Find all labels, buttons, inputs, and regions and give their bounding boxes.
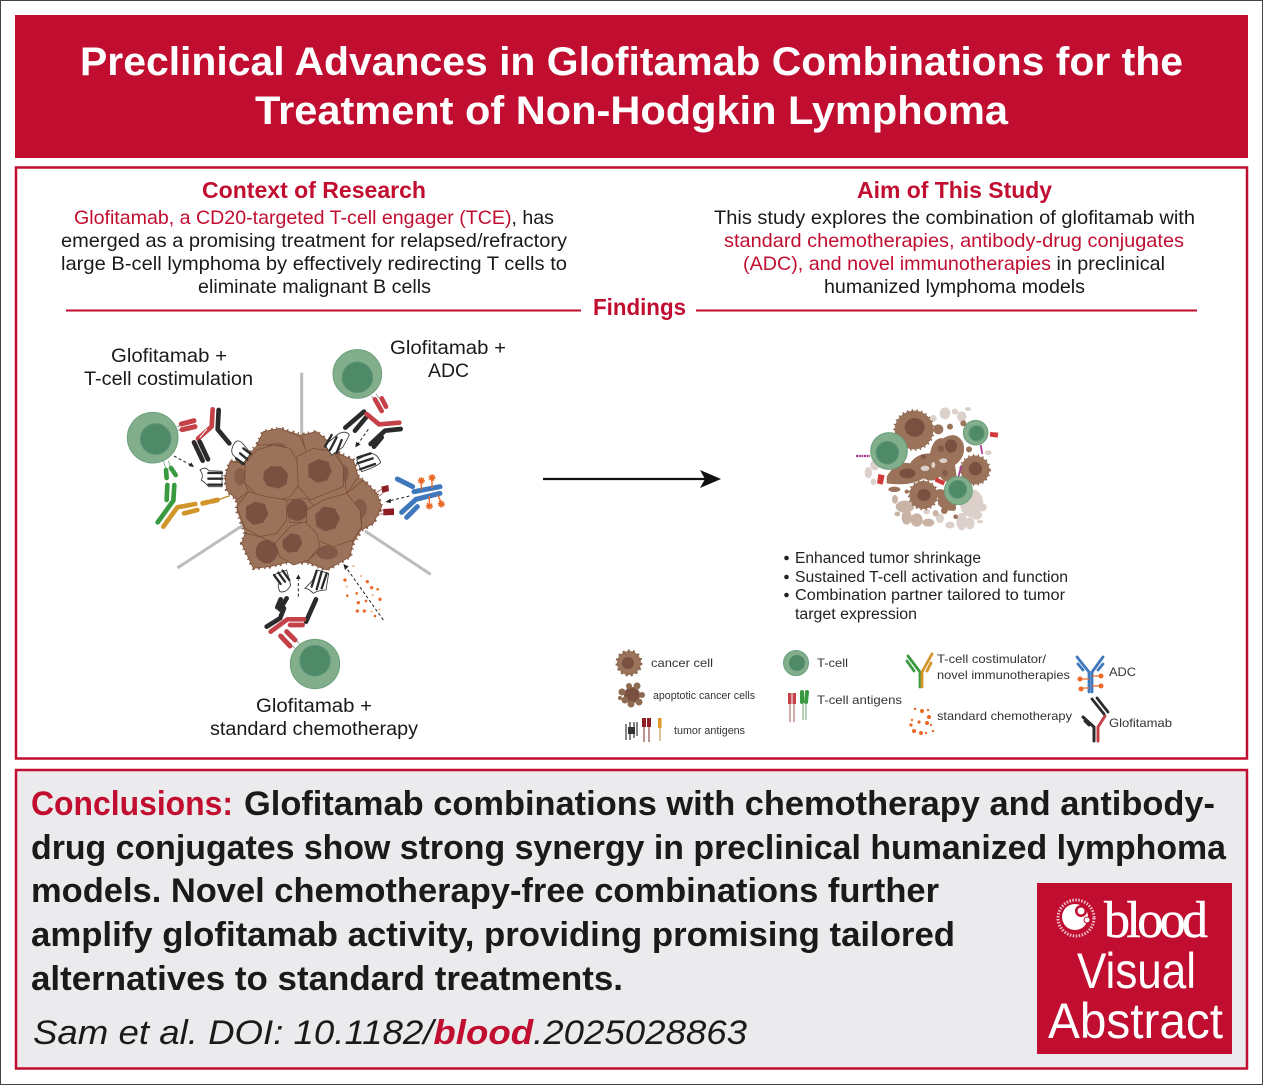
heading: findings: Findings: [593, 294, 686, 320]
label: standard chemotherapy: standard chemotherapy: [210, 719, 419, 740]
glofitamab and antigens: chemotherapy arm: [267, 570, 329, 648]
legend: ADC: ADC: [1109, 665, 1136, 679]
text block: context of research: large B-cell lymphoma by effectively redirecting T cells to: [61, 253, 567, 275]
legend: apoptotic cancer cells: apoptotic cancer cells: [653, 690, 755, 702]
legend: T-cell costimulator: [907, 652, 1070, 687]
text block: aim of this study: humanized lymphoma models: [824, 276, 1085, 298]
legend: [617, 650, 1172, 742]
surviving tumor cells: [887, 411, 989, 519]
text block: context of research: eliminate malignant B cells: [198, 276, 431, 298]
text block: conclusions: Glofitamab combinations with chemotherapy and antibody-: [244, 785, 1215, 823]
text block: context of research: emerged as a promising treatment for relapsed/refractory: [61, 230, 567, 252]
text block: conclusions: drug conjugates show strong synergy in preclinical humanized lymphoma: [31, 829, 1227, 867]
legend: apoptotic cancer cells: [618, 682, 755, 708]
badge: blood visual abstract: Abstract: [1048, 993, 1223, 1049]
T cell: chemotherapy arm: [290, 639, 340, 689]
legend: T-cell antigens: [788, 692, 902, 722]
text block: aim of this study: This study explores the combination of glofitamab with: [714, 207, 1195, 229]
apoptotic debris: [865, 407, 992, 530]
label: ADC: Glofitamab +: [390, 338, 506, 359]
legend: cancer cell: [617, 651, 713, 675]
T cell: costimulation arm: [127, 412, 178, 463]
text block: context of research: [61, 177, 567, 298]
tumor cell cluster: [225, 428, 382, 570]
text block: conclusions: amplify glofitamab activity, providing promising tailored: [31, 916, 955, 954]
text block: conclusions: Conclusions:: [31, 785, 233, 823]
chemotherapy particles and arrow: [343, 564, 383, 620]
title banner: [15, 15, 1248, 158]
legend: cancer cell: cancer cell: [651, 656, 713, 670]
legend: T-cell: T-cell: [817, 656, 848, 670]
text block: findings bullets: target expression: [795, 606, 917, 623]
text block: conclusions: models. Novel chemotherapy-free combinations further: [31, 872, 939, 910]
divider spokes: [177, 373, 431, 574]
legend: Glofitamab: Glofitamab: [1109, 716, 1172, 730]
legend: T-cell costimulator: novel immunotherapies: [937, 668, 1070, 682]
text block: aim of this study: [714, 177, 1195, 298]
legend: T-cell: [784, 650, 848, 676]
text block: conclusions: [31, 785, 1227, 998]
label: standard chemotherapy: [210, 696, 419, 740]
T cell: ADC arm: [333, 350, 382, 398]
label: ADC: [390, 338, 506, 382]
label: T-cell costimulation: T-cell costimulation: [84, 369, 253, 390]
panel: conclusions: [16, 770, 1247, 1068]
text block: context of research: Glofitamab, a CD20-targeted T-cell engager (TCE), has: [74, 207, 554, 229]
text block: aim of this study: (ADC), and novel immunotherapies in preclinical: [743, 253, 1165, 275]
logo: society emblem: [1058, 900, 1094, 936]
glofitamab and antigens: ADC arm: [325, 394, 444, 517]
badge: blood visual abstract: Visual: [1077, 943, 1196, 999]
arrow: treatment effect: [543, 470, 721, 488]
legend: T-cell costimulator: T-cell costimulator/: [937, 652, 1047, 666]
label: T-cell costimulation: [84, 346, 253, 390]
legend: T-cell antigens: T-cell antigens: [817, 693, 902, 707]
legend: ADC: [1077, 657, 1136, 692]
text block: findings bullets: Sustained T-cell activation and function: [795, 569, 1068, 586]
label: standard chemotherapy: Glofitamab +: [256, 696, 372, 717]
diagram: tumor with glofitamab combinations: [127, 350, 444, 689]
citation: Sam et al. DOI: 10.1182/ blood.2025028863: [33, 1014, 747, 1052]
legend: standard chemotherapy: standard chemotherapy: [937, 709, 1072, 723]
text block: findings bullets: Combination partner tailored to tumor: [795, 587, 1065, 604]
legend: standard chemotherapy: [909, 708, 1072, 735]
diagram: shrunken tumor with apoptotic debris: [856, 407, 998, 530]
text block: conclusions: alternatives to standard treatments.: [31, 960, 623, 998]
title banner: Treatment of Non-Hodgkin Lymphoma: [255, 89, 1009, 133]
text block: aim of this study: Aim of This Study: [857, 177, 1052, 203]
label: ADC: ADC: [428, 361, 469, 382]
central debris mass: [887, 435, 964, 484]
legend: tumor antigens: [626, 718, 745, 742]
text block: aim of this study: standard chemotherapies, antibody-drug conjugates: [724, 230, 1184, 252]
glofitamab and antigens: costimulation arm: [158, 409, 251, 527]
T cells and receptors: [856, 420, 998, 505]
legend: Glofitamab: [1083, 698, 1172, 741]
badge: blood visual abstract: blood: [1104, 892, 1208, 949]
text block: context of research: Context of Research: [202, 177, 426, 203]
badge: blood visual abstract: [1037, 883, 1232, 1054]
title banner: Preclinical Advances in Glofitamab Combinations for the: [80, 40, 1183, 84]
text block: findings bullets: [784, 550, 1068, 623]
panel: research and findings frame: [16, 168, 1247, 758]
label: T-cell costimulation: Glofitamab +: [111, 346, 227, 367]
text block: findings bullets: Enhanced tumor shrinkage: [795, 550, 981, 567]
legend: tumor antigens: tumor antigens: [674, 725, 745, 737]
